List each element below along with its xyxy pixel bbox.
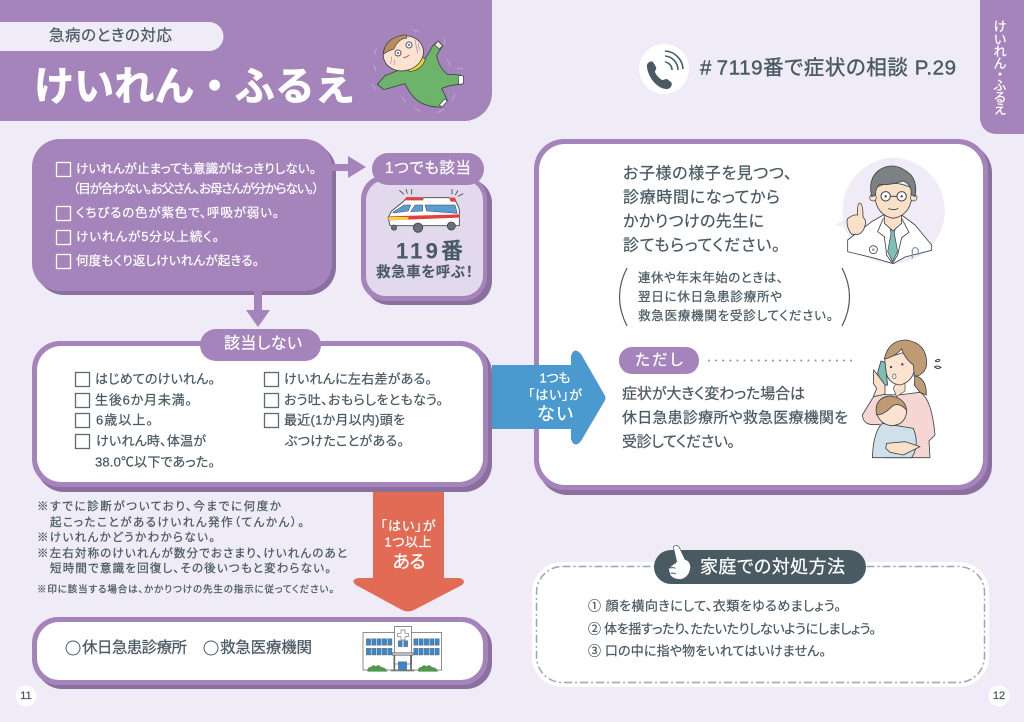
holiday note with parentheses: 翌日に休日急患診療所や [638, 289, 782, 304]
notes: 短時間で意識を回復し、その後いつもと変わらない。 [50, 561, 331, 575]
notes: ※印に該当する場合は、かかりつけの先生の指示に従ってください。 [37, 584, 334, 596]
title: けいれん・ふるえ [34, 65, 355, 109]
pill: however [619, 347, 699, 374]
icon: ambulance [388, 189, 463, 232]
right checklist [264, 372, 443, 448]
panel: home care [532, 545, 989, 687]
icon: hospital [363, 627, 442, 671]
header band [0, 0, 492, 121]
panel: see family doctor [534, 139, 992, 495]
arrow: no yes answers: ない [537, 404, 573, 424]
holiday note with parentheses: 救急医療機関を受診してください。 [638, 308, 833, 323]
caution text [622, 386, 848, 450]
right checklist: ぶつけたことがある。 [285, 434, 404, 448]
left checklist: 6歳以上。 [96, 412, 153, 428]
page number 12 [988, 686, 1010, 706]
heading pill: 家庭での対処方法 [700, 557, 845, 577]
dotted divider [709, 360, 852, 362]
panel: secondary checklist [32, 329, 492, 492]
caution text: 症状が大きく変わった場合は [622, 386, 805, 402]
left checklist: はじめてのけいれん。 [95, 372, 215, 386]
page tab: え [994, 102, 1006, 116]
icon: hand [668, 545, 691, 579]
urgent checklist: 何度もくり返しけいれんが起きる。 [76, 253, 259, 268]
arrow: yes, one or more [353, 492, 464, 612]
holiday note with parentheses [620, 268, 850, 326]
panel: medical institutions [32, 617, 492, 689]
icon: convulsing baby [372, 30, 463, 112]
institution names: 休日急患診療所 [82, 638, 187, 656]
right checklist: 最近(1か月以内)頭を [284, 412, 405, 428]
page tab: い [994, 32, 1006, 46]
right checklist: おう吐、おもらしをともなう。 [284, 392, 443, 408]
home care steps: ③ 口の中に指や物をいれてはいけません。 [588, 644, 826, 658]
panel: call 119 [361, 153, 492, 305]
arrow: yes, one or more: 1つ以上 [384, 534, 432, 550]
arrow: no yes answers: 1つも [540, 370, 570, 386]
phone consultation reference [639, 44, 956, 94]
home care steps: ② 体を揺すったり、たたいたりしないようにしましょう。 [588, 622, 876, 636]
arrow: no yes answers: 「はい」が [528, 388, 582, 402]
page tab: ふ [993, 78, 1006, 92]
pill: any applies: 1つでも該当 [385, 159, 471, 177]
pill: any applies [372, 153, 484, 185]
caution text: 受診してください。 [622, 434, 735, 450]
urgent checklist [56, 161, 319, 268]
section label pill [0, 22, 224, 51]
left checklist: 38.0℃以下であった。 [95, 454, 215, 470]
advice text [623, 164, 792, 254]
icon: mother on phone holding child [862, 340, 941, 458]
heading pill [654, 545, 866, 584]
119 label: 119番 [396, 238, 463, 264]
notes: ※けいれんかどうかわからない。 [37, 531, 215, 544]
notes: ※左右対称のけいれんが数分でおさまり、けいれんのあと [37, 546, 347, 560]
home care steps [588, 598, 876, 658]
arrow: no yes answers [492, 350, 606, 445]
left checklist [76, 372, 215, 470]
page number 11 [16, 686, 36, 706]
page tab: ・ [997, 66, 1003, 82]
advice text: かかりつけの先生に [623, 212, 764, 230]
urgent checklist: （目が合わない。お父さん、お母さんが分からない。） [73, 181, 319, 196]
arrow: yes, one or more: 「はい」が [380, 518, 436, 534]
advice text: 診てもらってください。 [623, 236, 780, 254]
section label pill: 急病のときの対応 [49, 26, 172, 44]
notes: ※すでに診断がついており、今までに何度か [37, 499, 282, 513]
arrow: to emergency [332, 156, 366, 178]
icon: phone [639, 44, 689, 94]
left checklist: 生後6か月未満。 [95, 392, 192, 408]
call ambulance label: 救急車を呼ぶ！ [376, 263, 473, 281]
page tab: ん [994, 56, 1007, 70]
urgent checklist: けいれんが止まっても意識がはっきりしない。 [76, 161, 316, 176]
page tab: け [994, 18, 1006, 34]
arrow: down to not applicable [246, 291, 270, 327]
urgent checklist: けいれんが5分以上続く。 [76, 229, 219, 244]
page number 11: 11 [20, 690, 32, 702]
panel: urgent symptoms [32, 139, 336, 295]
caution text: 休日急患診療所や救急医療機関を [622, 410, 848, 426]
home care steps: ① 顔を横向きにして、衣類をゆるめましょう。 [588, 598, 841, 614]
institution names [66, 638, 312, 656]
pill: not applicable: 該当しない [224, 334, 302, 352]
notes [37, 499, 347, 596]
advice text: 診療時間になってから [623, 188, 780, 206]
arrow: yes, one or more: ある [392, 552, 426, 572]
icon: doctor in speech bubble [834, 158, 945, 264]
page tab: る [994, 90, 1006, 104]
notes: 起こったことがあるけいれん発作（てんかん）。 [50, 515, 304, 529]
phone consultation reference: # 7119番で症状の相談 P.29 [700, 56, 956, 80]
pill: however: ただし [635, 351, 683, 369]
right checklist: けいれんに左右差がある。 [284, 372, 432, 386]
advice text: お子様の様子を見つつ、 [623, 164, 792, 182]
holiday note with parentheses: 連休や年末年始のときは、 [638, 271, 783, 285]
page tab [980, 0, 1024, 134]
page number 12: 12 [993, 690, 1005, 702]
left checklist: けいれん時、体温が [96, 434, 206, 448]
institution names: 救急医療機関 [220, 638, 312, 656]
pill: not applicable [200, 329, 321, 361]
urgent checklist: くちびるの色が紫色で、呼吸が弱い。 [76, 205, 279, 220]
page tab: れ [993, 44, 1007, 58]
